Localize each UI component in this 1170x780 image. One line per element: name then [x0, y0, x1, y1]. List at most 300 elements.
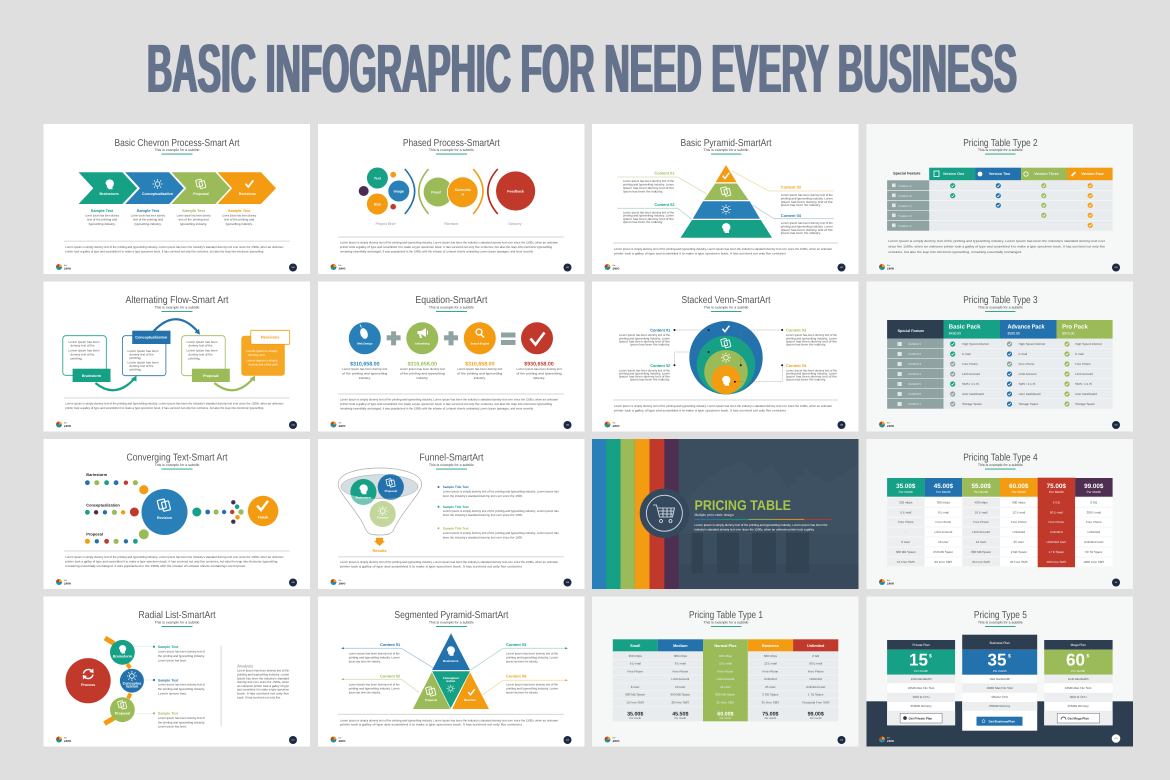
- callout: content 02: [623, 202, 675, 224]
- body text: remaining essentially unchanged. It was popularised in the 1960s with the release of Letraset sheets containing Lorem Ipsum passages, and more recently: [340, 249, 533, 253]
- step: conceptualization: dummy text of the: [130, 364, 154, 368]
- table header: Version Three: [1034, 172, 1059, 176]
- feature column: Content 2: [908, 352, 921, 356]
- step: revisions: dummy text.: [248, 353, 266, 357]
- analysis text: Lorem Ipsum has been dummy text of the: [237, 669, 289, 673]
- cart badge: [640, 489, 689, 538]
- callout: content 04: Content 04: [506, 674, 527, 678]
- column: unlimited: 2 GB: [812, 654, 819, 658]
- logo: zero: [64, 582, 71, 586]
- callout: content 02: printing and typesetting industry. Lorem: [619, 371, 670, 375]
- logo: [879, 264, 894, 271]
- table header: $490.00: [949, 332, 961, 336]
- column: medium: Limit Account: [671, 677, 689, 681]
- callout: content 03: Content 03: [786, 328, 807, 333]
- column: business: 75.00$: [762, 712, 779, 718]
- callout: content 01: printing and typesetting industry. Lorem: [623, 182, 674, 186]
- project brief circles: Text: [374, 176, 382, 180]
- card: private plan: 256MB Memory: [911, 704, 932, 708]
- table header: Version Four: [1081, 172, 1104, 176]
- column: 99.00: 8 GB: [1090, 500, 1097, 504]
- page badge: 105: [566, 424, 570, 427]
- process circle: Process: [81, 683, 95, 687]
- logo: [330, 736, 345, 743]
- analysis text: book. It has survived not only five: [237, 692, 289, 696]
- revision circles: [424, 176, 478, 208]
- callout: content 04: [781, 213, 833, 235]
- column: 75.00: [1046, 500, 1066, 564]
- card: private plan: $: [929, 654, 932, 660]
- column: small: -: [635, 677, 636, 681]
- column: small: 600 MB Space: [625, 693, 645, 697]
- sample texts: Sample Text: [137, 208, 160, 213]
- step: brainstorm: dummy text of the: [70, 344, 95, 348]
- table header: $975.00: [1062, 332, 1074, 336]
- step: revisions: [241, 330, 290, 376]
- card: private plan: 1GB Bandwidth: [911, 677, 932, 681]
- step: revisions: Lorem Ipsum is simply: [246, 349, 278, 353]
- page badge: [289, 264, 297, 272]
- page badge: 113: [566, 739, 570, 742]
- logo: zero: [64, 739, 71, 743]
- logo: the: [64, 579, 68, 582]
- body text: Lorem Ipsum is simply dummy text of the printing and typesetting industry. Lorem Ipsum has been the industry's standard dummy text ever since the 1500s, when an unknown: [614, 404, 832, 408]
- phase labels: Project Brief: [375, 222, 397, 226]
- card: private plan: Private Plan: [913, 643, 930, 647]
- body text: printer took a galley of type and scrambled it to make a type specimen book. It has survived not only five centuries, but also the leap into electronic typesetting: [65, 406, 264, 410]
- row: brainstorm: [85, 472, 148, 494]
- page badge: 102: [840, 266, 844, 269]
- callout: content 03: printing and typesetting industry. Lorem: [786, 336, 837, 340]
- column: medium: 650 MB Space: [670, 693, 690, 697]
- column: pro pack: E-mail: [1075, 352, 1084, 356]
- column: medium: 10 User: [675, 685, 686, 689]
- descriptions: industry.: [416, 376, 428, 380]
- cover background art: [692, 533, 809, 573]
- column: pro pack: User Dashboard: [1075, 392, 1097, 396]
- sample texts: Sample Text: [91, 208, 114, 213]
- descriptions: of the printing and typesetting: [342, 372, 388, 376]
- descriptions: of the printing and typesetting: [457, 372, 503, 376]
- panel: Equation: [318, 282, 584, 432]
- callout: content 03: [786, 328, 837, 346]
- callout: content 01: [623, 171, 675, 194]
- descriptions: industry.: [474, 376, 486, 380]
- body text: Lorem Ipsum is simply dummy text of the printing and typesetting industry. Lorem Ipsum has been the industry's standard dummy text ever since the 1500s, when an unknown: [340, 560, 558, 564]
- page badge: [1112, 421, 1120, 429]
- step: conceptualization: printing.: [130, 368, 142, 372]
- funnel: Proposal: [385, 489, 397, 493]
- item 1: the printing and typesetting industry.: [158, 654, 205, 658]
- sample texts: text of the printing and: [179, 218, 209, 222]
- column: 55.00: 400 mbps: [975, 500, 988, 504]
- column: 35.00: 15 Free SMS: [897, 560, 915, 564]
- logo: zero: [338, 267, 345, 271]
- conceptualization node: Conceptua: [123, 682, 142, 686]
- card: private plan: 15: [909, 651, 928, 670]
- column: 60.00: 600 mbps: [1012, 500, 1026, 504]
- body text: printer took a galley of type and scrambled it to make a type specimen book. It has survived not only five centuries, but also the leap into electronic typesetting: [65, 249, 264, 253]
- results arrow: Results: [372, 548, 387, 553]
- sample texts: typesetting industry.: [180, 222, 207, 226]
- callout: content 01: Ipsum has been dummy text of the: [623, 186, 674, 190]
- step: proposal: [182, 336, 230, 382]
- price headers: 35.00$: [896, 483, 916, 490]
- logo: zero: [612, 267, 619, 271]
- column: normal plus: Free Phone: [718, 669, 734, 673]
- column: unlimited: Per month: [810, 717, 822, 720]
- analysis text: [237, 664, 290, 699]
- price headers: 75.00$: [1047, 483, 1066, 490]
- body text: [340, 718, 558, 727]
- step: proposal: Proposal: [203, 374, 218, 378]
- step: proposal: Lorem Ipsum has been: [186, 340, 218, 344]
- column: 45.00: 8 E-mail: [938, 510, 949, 514]
- step: revisions: Revisions: [261, 335, 279, 340]
- feature column: [887, 339, 1113, 409]
- amounts: $930,658.00: [524, 362, 554, 368]
- column: basic pack: High Speed Internet: [962, 342, 989, 346]
- body text: Lorem Ipsum is simply dummy text of the printing and typesetting industry. Lorem Ipsum has been the industry's standard dummy text ever: [888, 239, 1105, 243]
- card: mega plan: $: [1086, 654, 1090, 660]
- subtitle: This is example for a subtitle: [429, 306, 474, 310]
- page badge: 114: [840, 739, 844, 742]
- callout: content 04: printing and typesetting industry. Lorem: [786, 371, 837, 375]
- column: 35.00: 8 User: [901, 540, 910, 544]
- logo: the: [887, 422, 891, 424]
- column: basic pack: Free Phone: [962, 362, 978, 366]
- page badge: 107: [1114, 424, 1119, 427]
- sample texts: [85, 208, 257, 226]
- column: business: Unlimited: [764, 677, 777, 681]
- heading: Pricing Table Type 4: [963, 452, 1038, 464]
- column: basic pack: Storage Space: [962, 402, 982, 406]
- logo: [604, 422, 619, 428]
- row: proposal: Proposal: [86, 532, 103, 536]
- callout: content 02: Content 02: [380, 674, 401, 678]
- column: 75.00: Unlimited: [1050, 530, 1063, 534]
- logo: the: [64, 422, 68, 424]
- callout: content 02: Ipsum has been the industry.: [623, 220, 663, 224]
- column: 35.00: 6 E-mail: [900, 510, 912, 514]
- column: small: 35.00$: [627, 712, 643, 718]
- step: brainstorm: Lorem Ipsum has been: [68, 348, 100, 352]
- callout: content 02: Ipsum has been the industry.: [349, 691, 381, 695]
- feedback circle: Feedback: [507, 189, 524, 193]
- column: small: 6 E-mail: [630, 662, 641, 666]
- sample texts: text of the printing and: [224, 218, 255, 222]
- cover text: [694, 523, 828, 532]
- cover subtitle: Multiple price table design: [694, 513, 734, 517]
- logo: zero: [64, 267, 71, 271]
- page badge: 101: [566, 266, 570, 269]
- list item 3: [438, 526, 559, 540]
- finish circle: Finish: [258, 516, 268, 520]
- column: small: Per month: [629, 717, 642, 720]
- panel: Alternating Flow: [44, 282, 310, 432]
- callout: content 04: printing and typesetting industry. Lorem: [506, 687, 559, 691]
- column: 99.00: [1083, 500, 1104, 564]
- analysis text: Analysis: [237, 664, 253, 668]
- column: 99.00: 50 TB Space: [1085, 550, 1103, 554]
- list item 3: Sample Title Text: [443, 526, 470, 530]
- step: brainstorm: [63, 336, 110, 382]
- logo: zero: [887, 739, 894, 743]
- table background: Normal Plus: [714, 644, 736, 648]
- cover text: industry's standard dummy text ever since the 1500s, when an unknown printer took a galley.: [694, 528, 815, 532]
- cover title: PRICING TABLE: [694, 497, 791, 513]
- descriptions: Lorem Ipsum has been dummy text: [400, 367, 445, 371]
- page badge: [1112, 264, 1120, 272]
- item 1: [153, 645, 205, 662]
- column: 75.00: 500 Free SMS: [1047, 560, 1066, 564]
- heading: Segmented Pyramid-SmartArt: [394, 610, 509, 621]
- funnel: Brainstorm: [356, 496, 372, 500]
- pyramid: [680, 165, 772, 238]
- table header: Version One: [943, 172, 964, 176]
- column: normal plus: Limit Account: [716, 677, 734, 681]
- column: 35.00: -: [905, 530, 906, 534]
- price headers: Per Month: [1012, 490, 1026, 494]
- page badge: 108: [291, 581, 296, 584]
- project brief circles: Size: [374, 202, 381, 206]
- table header: Advance Pack: [1008, 324, 1045, 331]
- column: business: 600 mbps: [764, 654, 777, 658]
- column: basic pack: E-mail: [962, 352, 971, 356]
- revision circle: Revision: [157, 516, 172, 520]
- callout: content 04: [506, 674, 559, 695]
- column: small: Free Phone: [627, 669, 643, 673]
- column: advance pack: E-mail: [1019, 352, 1027, 356]
- panel: Segmented Pyramid: [318, 596, 584, 746]
- flow arrows: [95, 319, 253, 390]
- revision circles: Correctio: [455, 188, 471, 192]
- callout: content 01: printing and typesetting industry. Lorem: [619, 336, 670, 340]
- logo: [604, 264, 619, 271]
- table background: Unlimited: [807, 644, 825, 648]
- equation circles: Search Engine: [470, 342, 490, 346]
- step: brainstorm: Lorem Ipsum has been: [68, 340, 100, 344]
- callout: content 02: Ipsum has been dummy text of the: [623, 217, 674, 221]
- column: 45.00: 300 mbps: [937, 500, 950, 504]
- card: mega plan: 60: [1066, 651, 1085, 670]
- column: pro pack: High Speed Internet: [1075, 342, 1102, 346]
- step: revisions: Lorem Ipsum is simply: [246, 358, 278, 362]
- chevron process: Revisions: [239, 192, 256, 196]
- body text: [614, 404, 832, 412]
- logo: [330, 422, 345, 428]
- page badge: [289, 421, 297, 429]
- feature rows: Feature A: [898, 184, 912, 188]
- logo: zero: [887, 424, 894, 428]
- panel: Phased Process: [318, 124, 584, 274]
- column: business: Per month: [765, 717, 777, 720]
- card: business plan: $: [1008, 654, 1011, 660]
- callout: content 02: Ipsum has been dummy text of the: [619, 375, 670, 379]
- subtitle: This is example for a subtitle: [978, 148, 1023, 152]
- arrow heads: [131, 329, 255, 382]
- chevron process: Proposal: [193, 192, 209, 196]
- item 2: Lorem Ipsum has.: [158, 691, 187, 695]
- step: proposal: dummy text of the: [188, 352, 213, 356]
- feature column: Content 1: [908, 342, 921, 346]
- card: business plan: 1GB Bandwidth: [989, 677, 1010, 681]
- logo: the: [887, 264, 891, 267]
- column: unlimited: 99.00$: [808, 712, 824, 718]
- table header: Special Feature: [893, 172, 920, 176]
- card: mega plan: Get Mega Plan: [1068, 716, 1089, 720]
- table background: Medium: [673, 644, 688, 648]
- callout: content 04: Ipsum has been the industry.: [786, 377, 826, 381]
- feature column: Content 5: [908, 382, 921, 386]
- column: unlimited: Free Phone: [808, 669, 824, 673]
- page badge: [289, 736, 297, 744]
- callout: content 03: Lorem Ipsum has been dummy text of the: [506, 651, 558, 655]
- sample texts: text of the printing and: [87, 218, 117, 222]
- callout: content 04: Content 04: [786, 363, 807, 368]
- project brief circles: Image: [394, 189, 404, 193]
- price headers: Per Month: [899, 490, 913, 494]
- column: 75.00: 60 E-mail: [1050, 510, 1063, 514]
- column: 35.00: [896, 500, 916, 564]
- logo: zero: [338, 582, 345, 586]
- column: 75.00: 2 GB: [1053, 500, 1060, 504]
- radial connectors: [104, 638, 130, 724]
- callout: content 02: Ipsum has been the industry.: [630, 377, 670, 381]
- equation circles: Advertising: [415, 342, 430, 346]
- body text: [340, 241, 558, 253]
- column: basic pack: User Dashboard: [962, 392, 984, 396]
- card: mega plan: 10MB Max File Size: [1065, 686, 1092, 690]
- item 3: [153, 712, 205, 729]
- colour stripes: [592, 439, 679, 589]
- body text: Lorem Ipsum is simply dummy text of the printing and typesetting industry. Lorem Ipsum has been the industry's standard dummy text ever since the 1500s, when an unknown: [65, 555, 284, 559]
- panel: Pricing Table Type 2: [866, 124, 1133, 274]
- logo: [56, 579, 71, 586]
- page badge: [564, 736, 572, 744]
- logo: zero: [612, 739, 619, 743]
- column: normal plus: [716, 654, 736, 720]
- price headers: Per Month: [1049, 490, 1064, 494]
- column: 55.00: Limit Account: [972, 530, 990, 534]
- table header: Pro Pack: [1062, 324, 1088, 331]
- column: basic pack: [950, 341, 989, 407]
- item 1: Lorem Ipsum has been dummy text of: [158, 650, 205, 654]
- body text: printer took a galley of type and scrambled it to make a type specimen book. It has survived not only five centuries: [614, 408, 787, 412]
- heading: Basic Chevron Process-Smart Art: [114, 138, 240, 149]
- column: 55.00: 25 Free SMS: [972, 560, 990, 564]
- step: proposal: dummy text of the: [188, 344, 213, 348]
- column: unlimited: Unlimited User: [806, 685, 826, 689]
- sample texts: text of the printing and: [133, 218, 163, 222]
- logo: zero: [887, 582, 894, 586]
- column: 55.00: 800 MB Space: [971, 550, 991, 554]
- column: pro pack: Storage Space: [1075, 402, 1095, 406]
- funnel: [338, 468, 422, 535]
- table header: [887, 320, 1113, 339]
- step: proposal: printing.: [188, 356, 201, 360]
- column: normal plus: 800 MB Space: [716, 693, 736, 697]
- feature column: Content 3: [908, 362, 921, 366]
- card: business plan: Per month: [993, 669, 1007, 673]
- heading: Pricing Table Type 1: [689, 610, 763, 621]
- feedback circle: [496, 171, 535, 211]
- analysis text: printing and typesetting industry. Lorem: [237, 672, 290, 676]
- column: advance pack: Limit Account: [1019, 372, 1037, 376]
- logo: [56, 264, 71, 271]
- column: 99.00: 1000 Free SMS: [1083, 560, 1104, 564]
- card: business plan: 30GHZ CPU: [991, 695, 1008, 699]
- step: conceptualization: Lorem Ipsum has been: [128, 349, 159, 353]
- sample texts: typesetting industry.: [89, 222, 116, 226]
- column: 45.00: Free Phone: [936, 520, 952, 524]
- page badge: [1112, 578, 1120, 586]
- column: 60.00: [1010, 500, 1028, 564]
- column: 75.00: 1 TB Space: [1048, 550, 1064, 554]
- feature rows: Feature C: [898, 204, 913, 208]
- card: mega plan: Mega Plan: [1071, 643, 1086, 647]
- callout: content 01: Ipsum has been dummy text of the: [619, 339, 670, 343]
- column: normal plus: 12 User: [720, 685, 731, 689]
- logo: [604, 736, 619, 743]
- callout: content 04: Ipsum has been the industry.: [781, 231, 821, 235]
- callout: content 04: Lorem Ipsum has been dummy text of the: [786, 368, 837, 372]
- segmented pyramid: Brainstorm: [443, 659, 459, 663]
- panel: Funnel: [318, 439, 584, 589]
- subtitle: This is example for a subtitle: [978, 463, 1023, 467]
- revision circles: n: [462, 192, 464, 196]
- item 2: Lorem Ipsum has been dummy text of: [158, 683, 205, 687]
- brainstorm node: [110, 640, 135, 665]
- price headers: 55.00$: [971, 483, 991, 490]
- column: medium: 8 E-mail: [675, 662, 686, 666]
- column: medium: 45.50$: [672, 712, 688, 718]
- item 3: Lorem Ipsum has been.: [158, 725, 187, 729]
- column: 35.00: Free Phone: [898, 520, 914, 524]
- callout: content 01: [349, 642, 401, 664]
- body text: Lorem Ipsum is simply dummy text of the printing and typesetting industry. Lorem Ipsum has been the industry's standard dummy text ever since the 1500s, when an unknown: [340, 241, 558, 245]
- heading: Pricing Table Type 2: [963, 138, 1038, 149]
- feature rows: [887, 180, 1113, 231]
- column: 99.00: Unlimited: [1088, 530, 1100, 534]
- item 2: [153, 678, 205, 695]
- column: unlimited: [802, 654, 830, 720]
- callout: content 03: Lorem Ipsum has been dummy text of the: [786, 333, 837, 337]
- check marks: [950, 183, 1093, 228]
- sample texts: Lorem Ipsum has been dummy: [177, 213, 211, 217]
- list item 2: Sample Title Text: [443, 505, 470, 509]
- subtitle: This is example for a subtitle: [154, 463, 200, 467]
- callout: content 03: Ipsum has been the industry.: [786, 342, 826, 346]
- subtitle: This is example for a subtitle: [978, 306, 1023, 310]
- column: 99.00: Unlimited User: [1084, 540, 1104, 544]
- column: normal plus: 60.00$: [717, 712, 734, 718]
- column: 60.00: Unlimited: [1013, 530, 1025, 534]
- callout: content 04: Ipsum has been the industry.: [506, 691, 538, 695]
- item 2: the printing and typesetting industry.: [158, 687, 205, 691]
- page badge: [1112, 734, 1120, 743]
- column: pro pack: [1064, 341, 1102, 407]
- page badge: [564, 264, 572, 272]
- sample texts: Sample Text: [228, 208, 251, 213]
- column: 35.00: 250 mbps: [899, 500, 913, 504]
- page badge: [838, 736, 846, 744]
- descriptions: [342, 367, 562, 380]
- heading: Radial List-SmartArt: [138, 610, 216, 621]
- chevron process: Brainstorm: [100, 192, 119, 196]
- logo: zero: [612, 424, 619, 428]
- descriptions: Lorem Ipsum has been dummy text: [342, 367, 387, 371]
